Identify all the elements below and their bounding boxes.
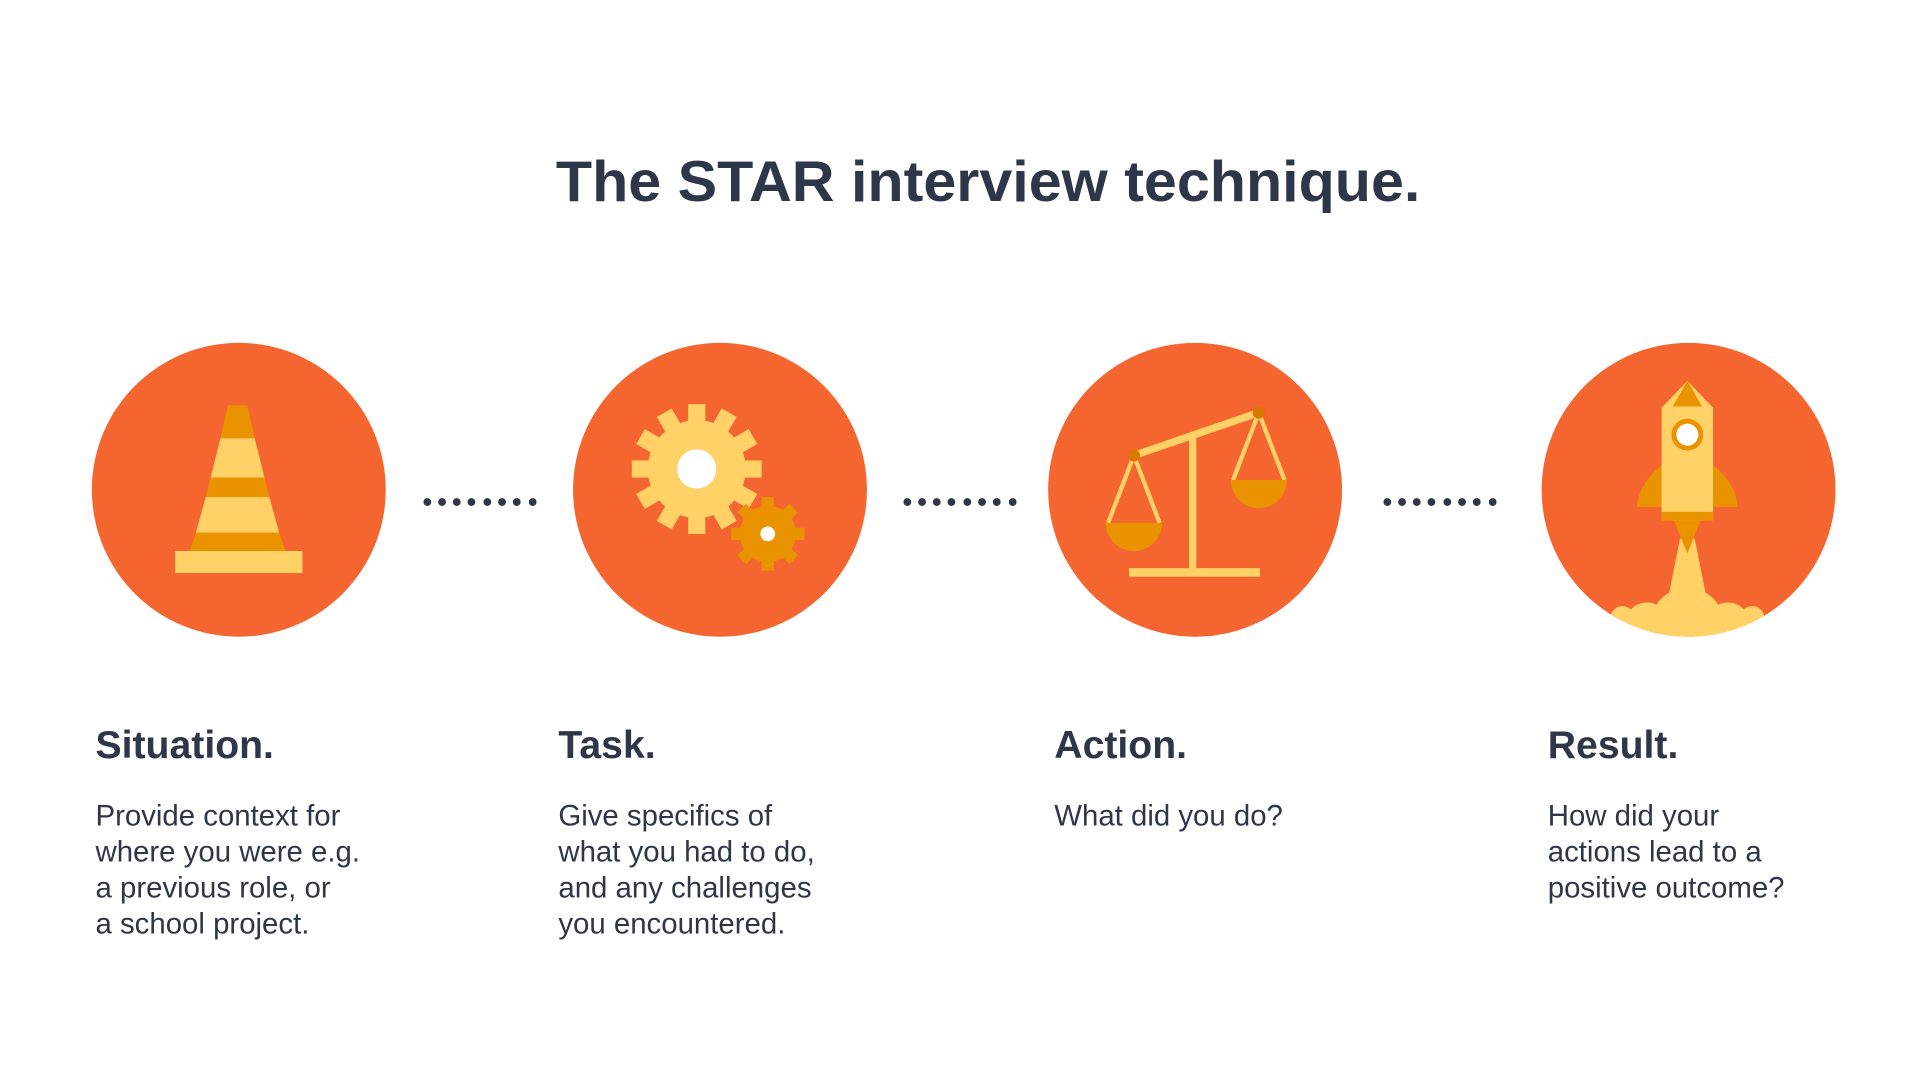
text block: action <box>1054 724 1283 832</box>
text block: task: you encountered. <box>558 908 785 941</box>
text block: situation: a previous role, or <box>96 872 331 905</box>
text block: task: Task. <box>558 724 656 767</box>
icon: rocket <box>1611 381 1764 637</box>
text block: situation: where you were e.g. <box>95 835 360 868</box>
text block: result: Result. <box>1548 724 1678 767</box>
panel: action icon <box>1048 343 1342 637</box>
text block: task <box>557 724 815 941</box>
text block: task: what you had to do, <box>557 835 815 868</box>
dotted connector 3 <box>1383 498 1497 506</box>
text block: situation: Situation. <box>96 724 274 767</box>
panel: result icon <box>1542 343 1836 661</box>
icon: traffic cone <box>175 405 302 573</box>
text block: action: What did you do? <box>1054 799 1283 832</box>
title: The STAR interview technique. <box>556 150 1420 214</box>
text block: result <box>1548 724 1785 905</box>
icon: gears <box>608 380 820 586</box>
panel: situation icon <box>92 343 386 637</box>
text block: result: How did your <box>1548 799 1719 832</box>
dotted connector 1 <box>423 498 537 506</box>
text block: task: and any challenges <box>558 872 812 905</box>
panel: task icon <box>573 343 867 637</box>
text block: situation <box>95 724 360 941</box>
text block: result: positive outcome? <box>1548 872 1785 905</box>
text block: action: Action. <box>1054 724 1187 767</box>
text block: task: Give specifics of <box>558 799 773 832</box>
icon: balance scale <box>1106 407 1287 577</box>
dotted connector 2 <box>903 498 1017 506</box>
text block: result: actions lead to a <box>1548 835 1762 868</box>
text block: situation: Provide context for <box>96 799 341 832</box>
text block: situation: a school project. <box>96 908 309 941</box>
